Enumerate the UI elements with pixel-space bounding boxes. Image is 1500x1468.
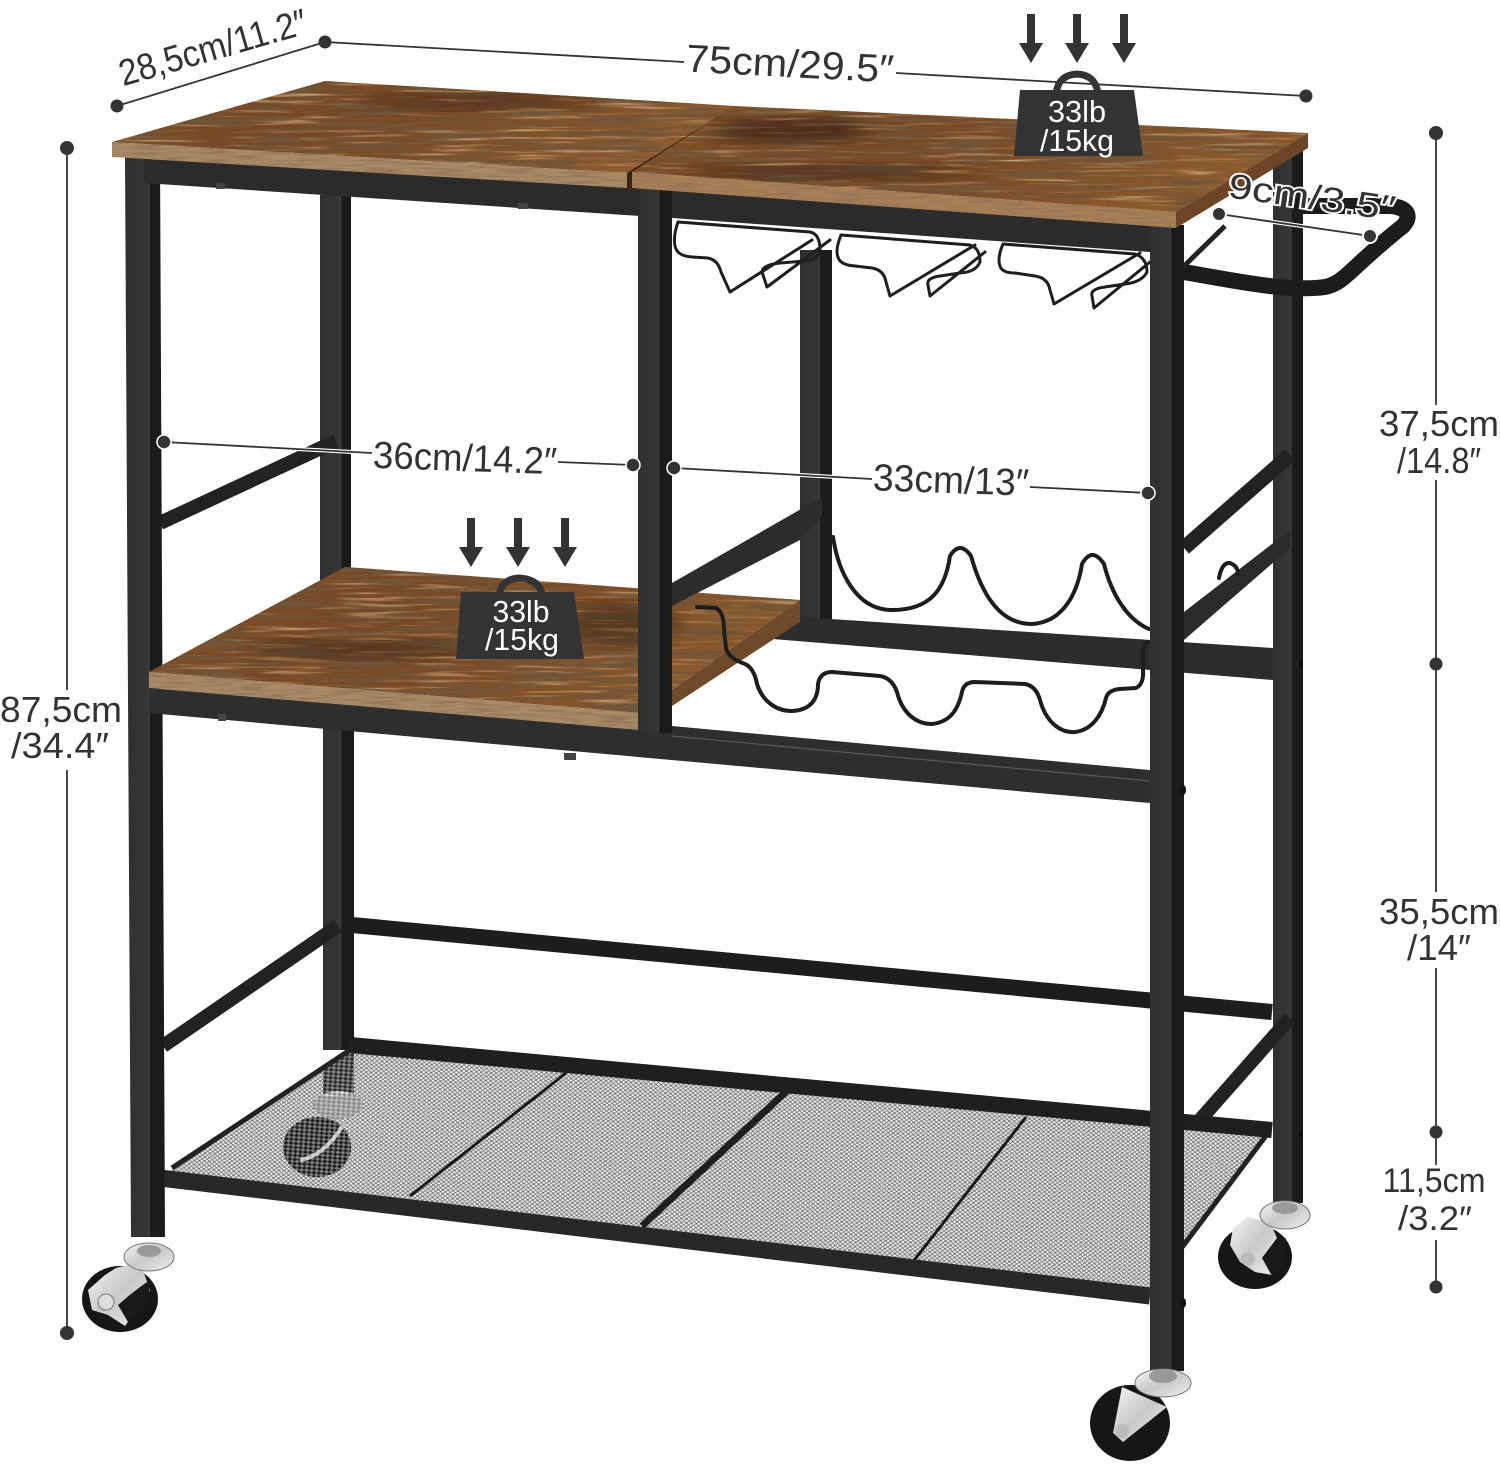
dimension: right bay width — [667, 457, 1155, 505]
dimension label: middle section: 35,5cm — [1379, 891, 1499, 932]
mesh — [168, 1048, 1268, 1290]
front mid rail — [149, 688, 1150, 803]
lower long tube rail — [352, 925, 1272, 1012]
right tabletop side edge — [1176, 133, 1308, 228]
dimension label: height — [0, 689, 122, 766]
upper wine rack — [833, 537, 1149, 629]
dimension label: bottom section — [1382, 1162, 1486, 1238]
wine glass racks — [674, 222, 1150, 308]
mesh side edges — [172, 1050, 1268, 1270]
lower shelf front edge — [149, 672, 640, 730]
left side upper tube — [160, 441, 336, 523]
dimension label: middle section: /14″ — [1407, 927, 1471, 968]
left tabletop front edge — [112, 142, 627, 188]
dimension label: top section — [1379, 403, 1499, 481]
load icon: top shelf weight — [1014, 74, 1143, 158]
dimension: width — [325, 42, 1306, 96]
dimension: right bay width: 33cm/13″ — [872, 457, 1030, 505]
left side lower tube — [163, 926, 338, 1046]
dimension label: top section: 37,5cm — [1379, 403, 1499, 444]
front-left leg — [125, 157, 165, 1237]
dimension label: height: 87,5cm — [0, 689, 122, 730]
right side lower tube — [1184, 1018, 1290, 1138]
right tabletop front edge — [632, 172, 1176, 228]
dimension label: height: /34.4″ — [11, 725, 109, 766]
dimension: height line — [66, 148, 68, 1333]
back-middle post — [800, 250, 832, 625]
apron tabs — [216, 183, 528, 209]
rail highlight — [672, 736, 1150, 781]
front lower rail and shelf — [149, 497, 1150, 803]
mesh bottom shelf — [160, 1045, 1272, 1296]
back-left leg and caster seen through mesh — [283, 1048, 363, 1177]
load icon: lower shelf weight — [456, 578, 584, 659]
front tube rail — [160, 1178, 1150, 1296]
left tabletop surface — [112, 81, 735, 173]
right side upper tube — [1184, 455, 1290, 548]
shelf tabs — [218, 714, 576, 760]
front-right leg — [1150, 225, 1184, 1371]
dimension: handle depth — [1212, 166, 1398, 243]
load icon: top shelf weight: /15kg — [1040, 123, 1114, 158]
dimension: handle depth: 9cm/3.5″ — [1226, 166, 1398, 228]
dimension: right vertical lines — [1435, 133, 1437, 1287]
dimension label: top section: /14.8″ — [1397, 440, 1481, 481]
thin dividers — [410, 1073, 1026, 1263]
casters — [82, 1201, 1310, 1461]
lower wooden shelf top — [149, 567, 800, 713]
back-left leg — [320, 195, 354, 1050]
load icon: top shelf arrows — [1019, 14, 1136, 63]
load icon: lower shelf arrows — [459, 518, 577, 567]
back mid rail — [760, 617, 1273, 680]
small hook — [1219, 563, 1238, 578]
back tube rail — [350, 1045, 1272, 1130]
dimension label: bottom section: 11,5cm — [1382, 1162, 1486, 1200]
front-left caster — [82, 1243, 174, 1332]
right tabletop surface — [632, 106, 1308, 212]
rack 3 — [999, 244, 1150, 308]
dimension label: width: 75cm/29.5″ — [685, 38, 895, 91]
top apron left — [144, 155, 640, 216]
rack 1 — [674, 222, 830, 292]
front-right caster — [1090, 1369, 1191, 1461]
cart frame back parts — [160, 145, 1303, 1203]
front frame — [144, 155, 1303, 1371]
back-right leg — [1273, 145, 1303, 1203]
handle — [1180, 206, 1408, 288]
back-right caster — [1218, 1201, 1310, 1289]
load icon: top shelf weight: 33lb — [1048, 94, 1106, 129]
load icon: lower shelf weight: 33lb — [492, 594, 550, 629]
bolts — [1180, 660, 1303, 1308]
wine bottle racks — [697, 537, 1238, 732]
lower wine rack — [697, 607, 1150, 732]
lower shelf right edge — [672, 600, 800, 706]
load icon: lower shelf weight: /15kg — [485, 622, 559, 657]
right side bar — [1184, 530, 1290, 640]
dimension label: bottom section: /3.2″ — [1398, 1200, 1472, 1238]
wooden top — [112, 81, 1308, 228]
gap between tabletop halves — [627, 106, 737, 190]
centre leg — [638, 186, 672, 733]
centre divider — [642, 1088, 790, 1226]
dimension: depth — [117, 42, 325, 106]
dimension: left bay width: 36cm/14.2″ — [372, 435, 558, 483]
dimension label: middle section — [1379, 891, 1499, 968]
rack 2 — [837, 235, 985, 296]
dimension: left bay width — [157, 435, 640, 483]
mid side bar — [672, 497, 822, 606]
top apron right — [672, 186, 1150, 252]
